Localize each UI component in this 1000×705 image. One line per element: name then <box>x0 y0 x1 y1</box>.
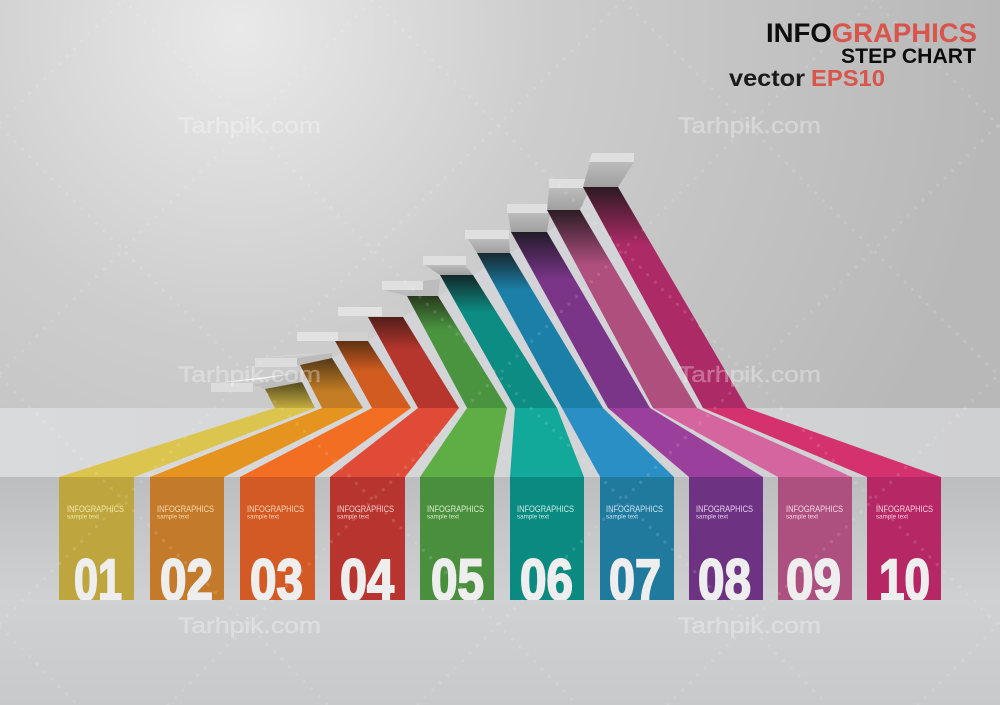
panel 02: 02 <box>160 548 213 613</box>
step 10 <box>583 153 634 187</box>
ribbon 02 <box>300 358 363 408</box>
panel 06 <box>510 477 584 613</box>
panel 10: 10 <box>879 548 930 613</box>
title <box>729 18 977 91</box>
panel 01 <box>59 477 134 613</box>
panel 02: sample text <box>157 514 189 520</box>
band 04 <box>330 408 459 477</box>
floor bands <box>59 408 941 477</box>
panel 09: INFOGRAPHICS <box>786 504 843 514</box>
band 06 <box>510 408 584 477</box>
watermark text <box>178 113 821 638</box>
ribbon 06 <box>440 275 557 408</box>
band 01 <box>59 408 315 477</box>
ribbon gaps <box>302 187 703 408</box>
panel 08: 08 <box>698 548 751 613</box>
title: INFOGRAPHICS <box>766 18 977 48</box>
step 5 <box>382 279 440 296</box>
step 8 <box>507 204 550 232</box>
panel 03: INFOGRAPHICS <box>247 504 304 514</box>
title: vector <box>729 65 805 91</box>
panel 04 <box>330 477 405 613</box>
watermark text: Tarhpik.com <box>178 613 321 638</box>
ribbon 07 <box>477 253 603 408</box>
band 03 <box>240 408 411 477</box>
ribbon 03 <box>335 341 411 408</box>
band 08 <box>608 408 763 477</box>
panel 08: sample text <box>696 514 728 520</box>
panel 01: INFOGRAPHICS <box>67 504 124 514</box>
step 9 <box>547 179 592 210</box>
panel 08: INFOGRAPHICS <box>696 504 753 514</box>
band 05 <box>420 408 507 477</box>
panel 10 <box>867 477 941 613</box>
panel 01: sample text <box>67 514 99 520</box>
ribbon 08 <box>511 232 650 408</box>
panel 02: INFOGRAPHICS <box>157 504 214 514</box>
step 1 <box>211 372 302 392</box>
panel 03: 03 <box>250 548 303 613</box>
panel 09: sample text <box>786 514 818 520</box>
panel 06: sample text <box>517 514 549 520</box>
title: STEP CHART <box>841 45 976 68</box>
staircase <box>211 153 634 392</box>
watermark text: Tarhpik.com <box>678 613 821 638</box>
background lower floor <box>0 477 1000 705</box>
step 2 <box>255 353 332 367</box>
step 3 <box>297 332 368 341</box>
panel 05: 05 <box>431 548 484 613</box>
panel 07: 07 <box>609 548 661 613</box>
ribbon 10 <box>583 187 747 408</box>
panel 04: sample text <box>337 514 369 520</box>
step 7 <box>465 230 510 253</box>
band 09 <box>653 408 852 477</box>
ribbon 09 <box>547 210 697 408</box>
watermark text: Tarhpik.com <box>678 113 821 138</box>
title: EPS10 <box>811 65 885 91</box>
upper ribbons rising to the steps <box>265 187 747 408</box>
panel 10: INFOGRAPHICS <box>876 504 933 514</box>
watermark text: Tarhpik.com <box>178 362 321 387</box>
background floor strip <box>0 408 1000 477</box>
background wall <box>0 0 1000 408</box>
band 02 <box>150 408 363 477</box>
panel 10: sample text <box>876 514 908 520</box>
panel 04: INFOGRAPHICS <box>337 504 394 514</box>
panel 06: 06 <box>520 548 573 613</box>
panel 05 <box>420 477 494 613</box>
panel 08 <box>689 477 763 613</box>
ribbon 04 <box>368 317 459 408</box>
step 4 <box>338 307 403 316</box>
watermark text: Tarhpik.com <box>178 113 321 138</box>
band 10 <box>703 408 941 477</box>
numbered panels <box>59 477 941 613</box>
panel 09 <box>778 477 852 613</box>
panel 03: sample text <box>247 514 279 520</box>
band 07 <box>562 408 674 477</box>
watermark text: Tarhpik.com <box>678 362 821 387</box>
panel 07 <box>600 477 674 613</box>
panel 03 <box>240 477 315 613</box>
panel 07: INFOGRAPHICS <box>606 504 663 514</box>
panel 06: INFOGRAPHICS <box>517 504 574 514</box>
step 6 <box>423 256 473 275</box>
ribbon 01 <box>265 382 315 408</box>
panel 02 <box>150 477 224 613</box>
panel 05: sample text <box>427 514 459 520</box>
panel 05: INFOGRAPHICS <box>427 504 484 514</box>
panel 07: sample text <box>606 514 638 520</box>
panel 01: 01 <box>74 548 122 613</box>
panel 04: 04 <box>340 548 394 613</box>
ribbon 05 <box>407 296 507 408</box>
panel 09: 09 <box>786 548 841 613</box>
